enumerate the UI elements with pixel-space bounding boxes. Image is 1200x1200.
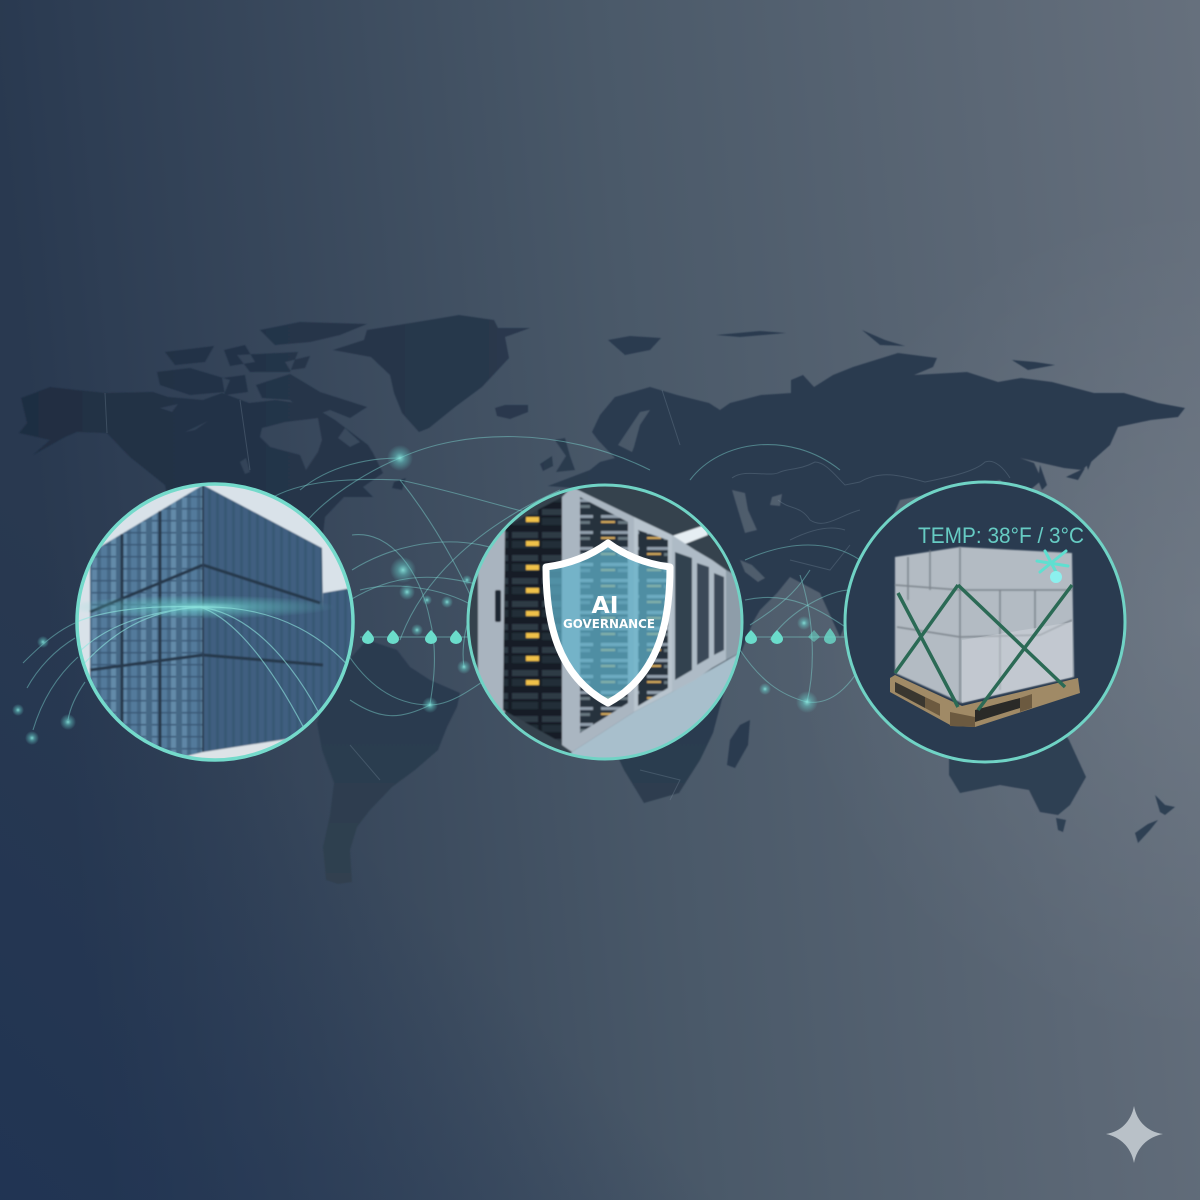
- rear container stack: [322, 588, 352, 704]
- network arcs: [23, 437, 960, 730]
- rack two frame: [562, 487, 634, 752]
- container ring: [77, 484, 353, 760]
- South America: [317, 640, 460, 884]
- Africa: [480, 500, 735, 803]
- Tasmania: [1056, 818, 1066, 832]
- rack two interior: [580, 497, 628, 733]
- Australia: [930, 700, 1086, 815]
- rack LEDs: [526, 517, 539, 685]
- UK and Ireland: [540, 438, 575, 472]
- shield text governance: GOVERNANCE: [563, 617, 655, 631]
- data centre ring: [468, 485, 742, 759]
- load shading: [895, 547, 1072, 703]
- ceiling: [470, 486, 734, 753]
- floor: [570, 654, 736, 758]
- North America: [19, 387, 383, 640]
- country borders: [105, 390, 1010, 800]
- Svalbard and Arctic Russia: [608, 330, 1055, 370]
- tier seams: [90, 511, 323, 760]
- door handle: [495, 590, 501, 622]
- Japan islands: [1066, 468, 1085, 480]
- sky: [78, 486, 348, 750]
- droplet timeline: [360, 628, 845, 644]
- snowflake icon: [1037, 551, 1068, 583]
- data glow band: [80, 596, 323, 618]
- receding racks: [634, 517, 672, 712]
- world map: [19, 315, 1185, 884]
- temperature readout: TEMP: 38°F / 3°C: [918, 523, 1084, 548]
- icon: four-point star: [1106, 1106, 1163, 1163]
- pallet ring: [845, 482, 1125, 762]
- Iceland: [495, 405, 528, 419]
- left rack door: [476, 530, 506, 714]
- pallet backdrop: [845, 482, 1125, 762]
- Kamchatka and Sakhalin: [1038, 427, 1108, 490]
- green straps: [895, 585, 1072, 710]
- Arctic islands: [157, 322, 406, 490]
- Greenland: [333, 315, 530, 432]
- rack one: [503, 497, 562, 743]
- Madagascar: [727, 720, 750, 768]
- container stack side: [203, 485, 325, 752]
- network nodes: [12, 445, 818, 745]
- container stack doors: [90, 485, 203, 765]
- AI governance shield: [546, 543, 670, 703]
- wrapped load: [895, 547, 1074, 703]
- Eurasia: [548, 353, 1185, 663]
- ground: [90, 733, 340, 770]
- panel: cold-chain pallet: [845, 482, 1125, 762]
- panel: AI governance data centre: [465, 480, 750, 770]
- New Zealand: [1135, 795, 1175, 843]
- panel: shipping containers: [65, 480, 360, 770]
- shield text AI: AI: [592, 593, 618, 619]
- ceiling light: [672, 526, 709, 544]
- wooden pallet: [890, 675, 1080, 727]
